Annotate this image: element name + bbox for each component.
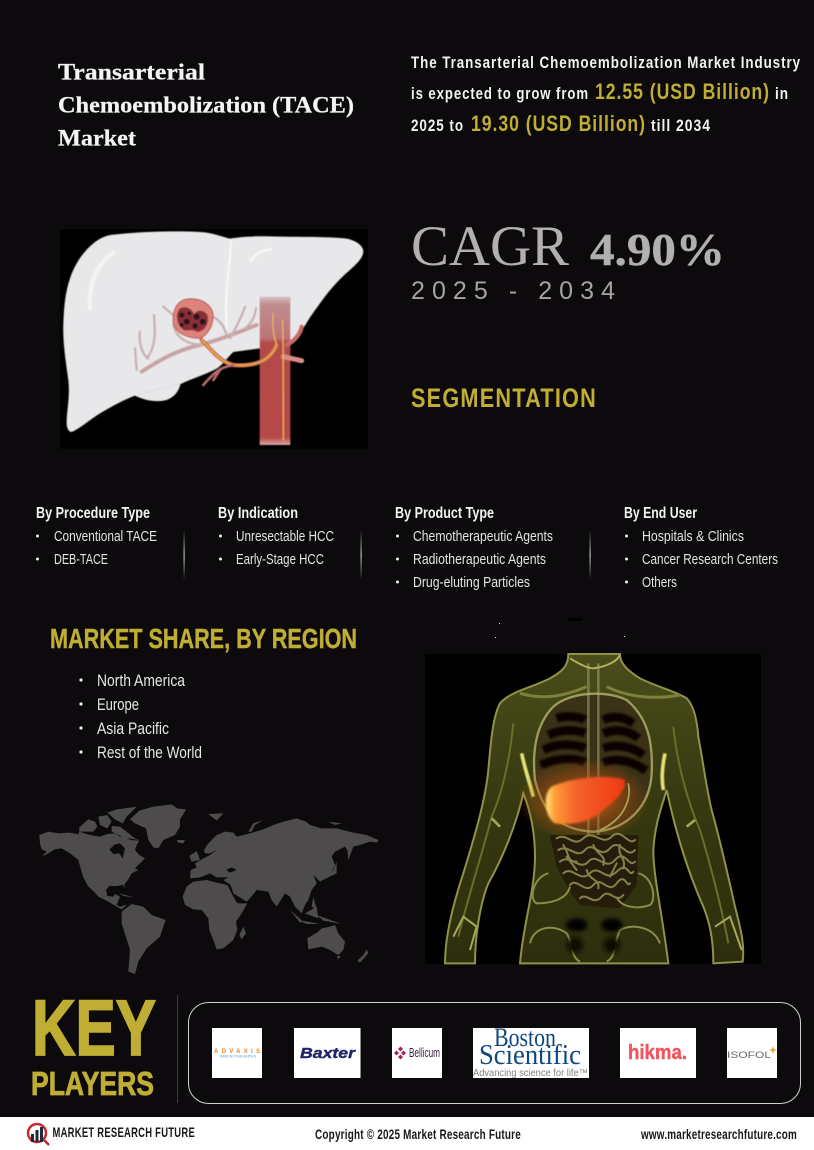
logo: Isofol xyxy=(727,1028,777,1078)
liver shape xyxy=(63,231,363,432)
market share heading: MARKET SHARE, BY REGION xyxy=(50,623,357,654)
region list: Europe xyxy=(97,695,139,714)
CAGR figure: 4.90% xyxy=(590,224,725,275)
column: by indication: By Indication xyxy=(218,505,298,522)
market growth summary: in xyxy=(775,84,789,103)
column: by end user: Hospitals & Clinics xyxy=(642,528,744,545)
segmentation heading: SEGMENTATION xyxy=(411,383,597,413)
column: by end user xyxy=(624,505,778,591)
illustration: human torso with glowing liver xyxy=(425,654,761,964)
column: by end user: Others xyxy=(642,574,677,591)
key players heading xyxy=(31,983,156,1102)
logo: Isofol: ISOFOL xyxy=(727,1050,771,1060)
key players heading: PLAYERS xyxy=(31,1065,154,1102)
market growth summary: 12.55 (USD Billion) xyxy=(595,79,770,104)
segmentation columns xyxy=(36,505,778,591)
logo: Baxter: Baxter xyxy=(300,1045,356,1062)
intestines xyxy=(550,834,638,908)
world map xyxy=(39,804,378,974)
footer brand name: MARKET RESEARCH FUTURE xyxy=(52,1124,195,1140)
hepatic arteries xyxy=(135,307,302,440)
logo: Advaxis: ADVAXIS xyxy=(214,1049,260,1055)
column: by end user: By End User xyxy=(624,505,697,522)
column: by procedure type: By Procedure Type xyxy=(36,505,150,522)
key players panel xyxy=(188,1002,800,1104)
title: Transarterial xyxy=(58,60,205,84)
logo: Advaxis: IMMUNOTHERAPIES xyxy=(220,1054,256,1058)
liver glow xyxy=(517,758,650,842)
column: by product type: Radiotherapeutic Agents xyxy=(413,551,546,568)
column: by product type: By Product Type xyxy=(395,505,494,522)
column: by product type: Drug-eluting Particles xyxy=(413,574,530,591)
liver lobe crease xyxy=(226,241,231,330)
column: by end user: Cancer Research Centers xyxy=(642,551,778,568)
column: by product type xyxy=(395,505,553,591)
pelvis xyxy=(530,873,660,962)
region list: North America xyxy=(97,671,185,690)
market growth summary: 19.30 (USD Billion) xyxy=(471,111,646,136)
market growth summary xyxy=(411,53,801,136)
region list: Asia Pacific xyxy=(97,719,169,738)
illustration: liver with tumour and arteries xyxy=(60,229,368,449)
CAGR figure xyxy=(411,215,725,305)
logo: Bellicum: Bellicum xyxy=(409,1045,440,1060)
logo: Boston Scientific: Boston xyxy=(494,1023,556,1052)
ribcage xyxy=(453,655,742,950)
logo: Boston Scientific: Advancing science for life™ xyxy=(473,1068,588,1079)
logo: Hikma xyxy=(620,1028,696,1078)
CAGR figure: 2025 - 2034 xyxy=(411,277,615,305)
market growth summary: is expected to grow from xyxy=(411,84,589,103)
column: by procedure type xyxy=(36,505,157,568)
title xyxy=(58,60,354,150)
liver xyxy=(546,777,625,824)
column: by procedure type: DEB-TACE xyxy=(54,551,108,568)
footer xyxy=(0,1117,814,1150)
column: by indication: Unresectable HCC xyxy=(236,528,334,545)
logo: Boston Scientific: Scientific xyxy=(479,1040,581,1071)
aorta xyxy=(260,297,290,445)
copyright: Copyright © 2025 Market Research Future xyxy=(315,1126,521,1142)
tumour xyxy=(173,299,213,338)
logo: Advaxis xyxy=(212,1028,262,1078)
region list xyxy=(79,671,202,762)
title: Market xyxy=(58,126,136,150)
logo: Bellicum xyxy=(392,1028,442,1078)
title: Chemoembolization (TACE) xyxy=(58,92,354,118)
key players heading: KEY xyxy=(32,983,156,1072)
column: by product type: Chemotherapeutic Agents xyxy=(413,528,553,545)
logo: Hikma: hikma. xyxy=(628,1042,687,1064)
logo: Boston Scientific xyxy=(473,1023,589,1079)
market growth summary: 2025 to xyxy=(411,116,464,135)
region list: Rest of the World xyxy=(97,743,202,762)
column: by indication: Early-Stage HCC xyxy=(236,551,324,568)
CAGR figure: CAGR xyxy=(411,215,569,278)
body silhouette xyxy=(445,654,743,963)
market growth summary: till 2034 xyxy=(651,116,711,135)
footer logo icon xyxy=(28,1124,49,1145)
column: by procedure type: Conventional TACE xyxy=(54,528,157,545)
column: by indication xyxy=(218,505,334,568)
logo: Baxter xyxy=(294,1028,360,1078)
